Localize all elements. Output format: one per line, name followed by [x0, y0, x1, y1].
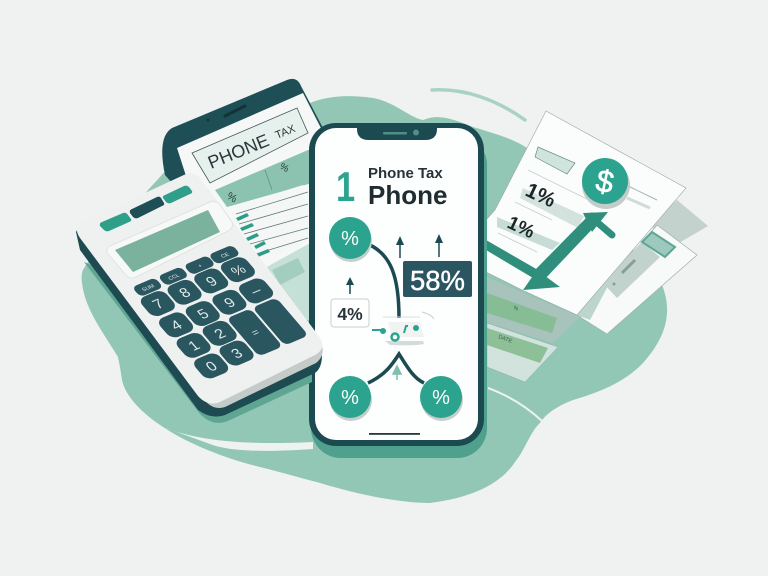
key labels: 8	[176, 285, 195, 301]
key labels: +	[197, 263, 204, 269]
front paper	[486, 111, 686, 315]
grey fan	[650, 200, 708, 247]
key labels: 0	[202, 359, 221, 375]
stat box 58%	[403, 261, 472, 297]
key labels: –	[247, 283, 266, 299]
tax header box	[192, 108, 308, 183]
number keys	[137, 255, 312, 381]
table header	[215, 150, 345, 207]
rear paper	[577, 225, 697, 334]
stat box 4%	[331, 299, 369, 327]
speaker	[225, 106, 245, 116]
subtitle: Phone Tax	[368, 165, 443, 182]
calculator edge	[203, 335, 323, 408]
tax header box: PHONE	[205, 130, 272, 173]
stat box 4%: 4%	[337, 304, 363, 324]
green cards: DATE	[497, 334, 513, 345]
tax header box: TAX	[274, 123, 298, 142]
key labels: 4	[167, 318, 186, 334]
key labels: %	[227, 262, 249, 279]
main phone	[309, 123, 487, 458]
calculator face	[77, 173, 322, 404]
top buttons	[100, 186, 192, 231]
percent circle top	[329, 217, 372, 262]
green cards: %	[512, 305, 519, 313]
key labels: 3	[228, 346, 247, 362]
key labels: 2	[211, 326, 230, 342]
number one: 1	[336, 164, 355, 211]
connectors	[368, 245, 424, 383]
key labels: SUM	[141, 284, 157, 293]
white sweep left	[163, 427, 313, 451]
keypad	[128, 244, 312, 381]
key labels: CCL	[167, 273, 181, 282]
central mini icon	[372, 312, 434, 345]
percent circle bottom left	[329, 376, 372, 421]
home bar	[369, 433, 420, 435]
display	[107, 201, 232, 278]
key labels: 9	[203, 274, 221, 290]
table header: %	[224, 190, 239, 206]
function keys	[132, 245, 241, 297]
background blob	[82, 96, 667, 503]
small arrow	[393, 366, 401, 380]
table header: %	[278, 161, 291, 175]
percent circle top: %	[341, 228, 359, 250]
key labels: 1	[185, 338, 204, 354]
calculator base	[76, 200, 322, 417]
key labels: 5	[194, 306, 213, 322]
label 1% lower: 1%	[504, 212, 538, 243]
key labels: 9	[221, 295, 239, 311]
phone shadow	[311, 135, 487, 458]
key labels	[140, 251, 303, 375]
phone screen	[315, 128, 478, 440]
dollar coin: $	[593, 163, 617, 200]
calculator	[76, 173, 323, 423]
tablet screen	[177, 93, 345, 320]
right paper stack	[486, 111, 708, 382]
stat box 58%: 58%	[410, 265, 465, 296]
growth arrow	[486, 212, 612, 290]
percent circle bottom left: %	[341, 387, 359, 409]
notch	[357, 125, 437, 140]
table rows	[233, 185, 312, 320]
paper content	[497, 147, 657, 252]
label 1%: 1%	[522, 179, 559, 212]
green cards	[486, 277, 580, 382]
title: Phone	[368, 180, 447, 210]
arrows up	[346, 234, 443, 294]
percent circle bottom right: %	[432, 387, 450, 409]
key labels: CE	[220, 252, 231, 260]
dollar coin	[582, 158, 630, 209]
percent circle bottom right	[420, 376, 463, 421]
key labels: =	[249, 327, 263, 339]
back tablet	[162, 79, 345, 320]
phone body	[309, 123, 484, 446]
decorative arc	[432, 90, 525, 120]
white sweep right	[488, 388, 542, 421]
key labels: 7	[149, 296, 168, 312]
tablet body	[162, 79, 345, 300]
calculator cast shadow	[84, 262, 312, 423]
camera	[206, 118, 210, 122]
